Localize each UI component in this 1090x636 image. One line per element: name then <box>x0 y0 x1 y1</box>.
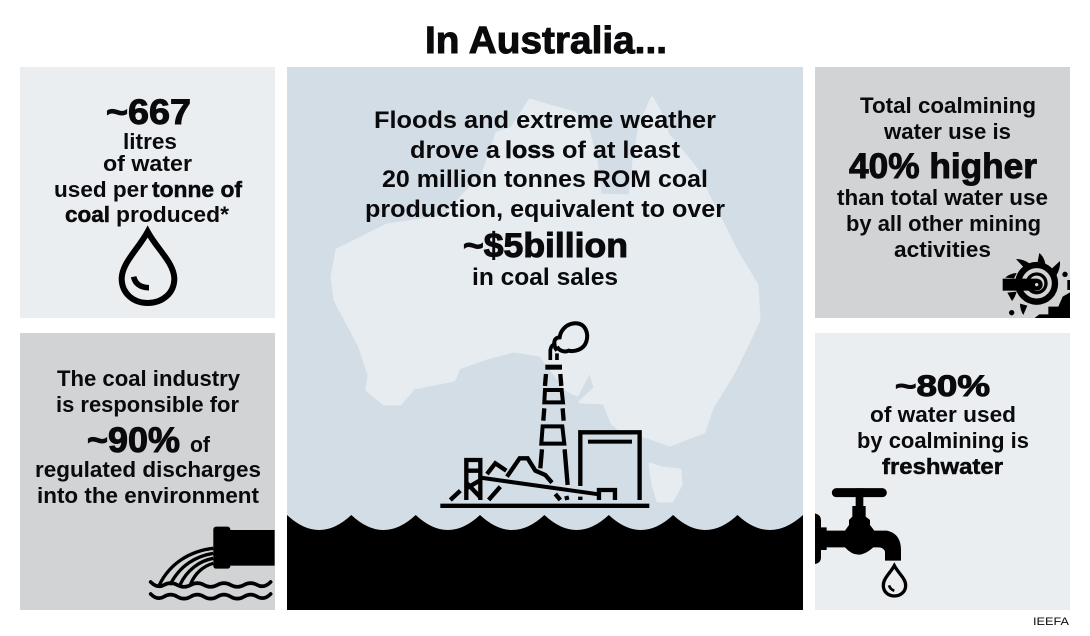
text: litres of water used per tonne of coal produced: of water <box>103 151 192 176</box>
text: litres of water used per tonne of coal produced: produced* <box>116 202 229 227</box>
text: regulated discharges into the environment: regulated discharges <box>35 457 261 482</box>
text: floods and extreme weather: drove a <box>410 137 501 164</box>
title: In Australia... <box>425 20 667 62</box>
panel: coalmining water use vs other mining <box>815 67 1071 319</box>
text: than total water use by all other mining activities <box>837 185 1048 262</box>
panel: central flood impact <box>287 67 803 610</box>
text: floods and extreme weather: 20 million tonnes ROM coal <box>382 166 708 193</box>
text: floods and extreme weather: production, equivalent to over <box>365 196 725 223</box>
text: than total water use by all other mining activities: by all other mining <box>846 211 1041 236</box>
stat: ~$5billion: ~$5billion <box>463 227 628 265</box>
panel: freshwater share <box>815 333 1070 610</box>
stat: ~80%: ~80% <box>895 370 990 403</box>
text: litres of water used per tonne of coal produced <box>54 129 243 227</box>
icon: mining bucket wheel <box>1003 253 1071 319</box>
text: the coal industry is responsible for: is responsible for <box>56 392 239 417</box>
stat: ~90% of: ~90% <box>87 421 180 460</box>
text: of water used by coalmining is freshwater: by coalmining is <box>857 428 1029 453</box>
text: the coal industry is responsible for <box>56 366 240 417</box>
floodwater waves <box>287 515 803 610</box>
text: total coalmining water use is <box>860 93 1036 144</box>
text: than total water use by all other mining activities: than total water use <box>837 185 1048 210</box>
stat: ~667: ~667 <box>106 93 191 132</box>
icon: discharge pipe <box>151 527 275 599</box>
panel: regulated discharges <box>20 333 275 610</box>
text: the coal industry is responsible for: The coal industry <box>57 366 240 391</box>
stat: ~90% of: of <box>190 432 210 457</box>
text: of water used by coalmining is freshwater: of water used <box>870 402 1016 427</box>
text: regulated discharges into the environment: into the environment <box>37 483 259 508</box>
text: total coalmining water use is: Total coalmining <box>860 93 1036 118</box>
text: floods and extreme weather <box>365 107 725 223</box>
text: floods and extreme weather: loss <box>505 137 555 164</box>
icon: coal power plant <box>440 323 649 508</box>
text: litres of water used per tonne of coal produced: litres <box>123 129 177 154</box>
stat: 40% higher: 40% higher <box>849 147 1037 186</box>
text: regulated discharges into the environment <box>35 457 261 508</box>
icon: water drop <box>122 232 174 303</box>
text: in coal sales: in coal sales <box>472 264 618 291</box>
text: floods and extreme weather: of at least <box>562 137 680 164</box>
text: floods and extreme weather: Floods and extreme weather <box>374 107 716 134</box>
icon: water tap with drop <box>815 488 906 596</box>
text: litres of water used per tonne of coal produced: used per <box>54 177 148 202</box>
source credit: IEEFA <box>1033 616 1070 628</box>
text: of water used by coalmining is freshwater: freshwater <box>882 454 1003 479</box>
text: than total water use by all other mining activities: activities <box>894 237 991 262</box>
panel: litres of water per tonne of coal <box>20 67 275 318</box>
text: litres of water used per tonne of coal produced: tonne of <box>152 177 243 202</box>
map: Australia <box>332 98 759 501</box>
text: of water used by coalmining is freshwater <box>857 402 1029 479</box>
text: litres of water used per tonne of coal produced: coal <box>65 202 110 227</box>
text: total coalmining water use is: water use is <box>883 119 1011 144</box>
